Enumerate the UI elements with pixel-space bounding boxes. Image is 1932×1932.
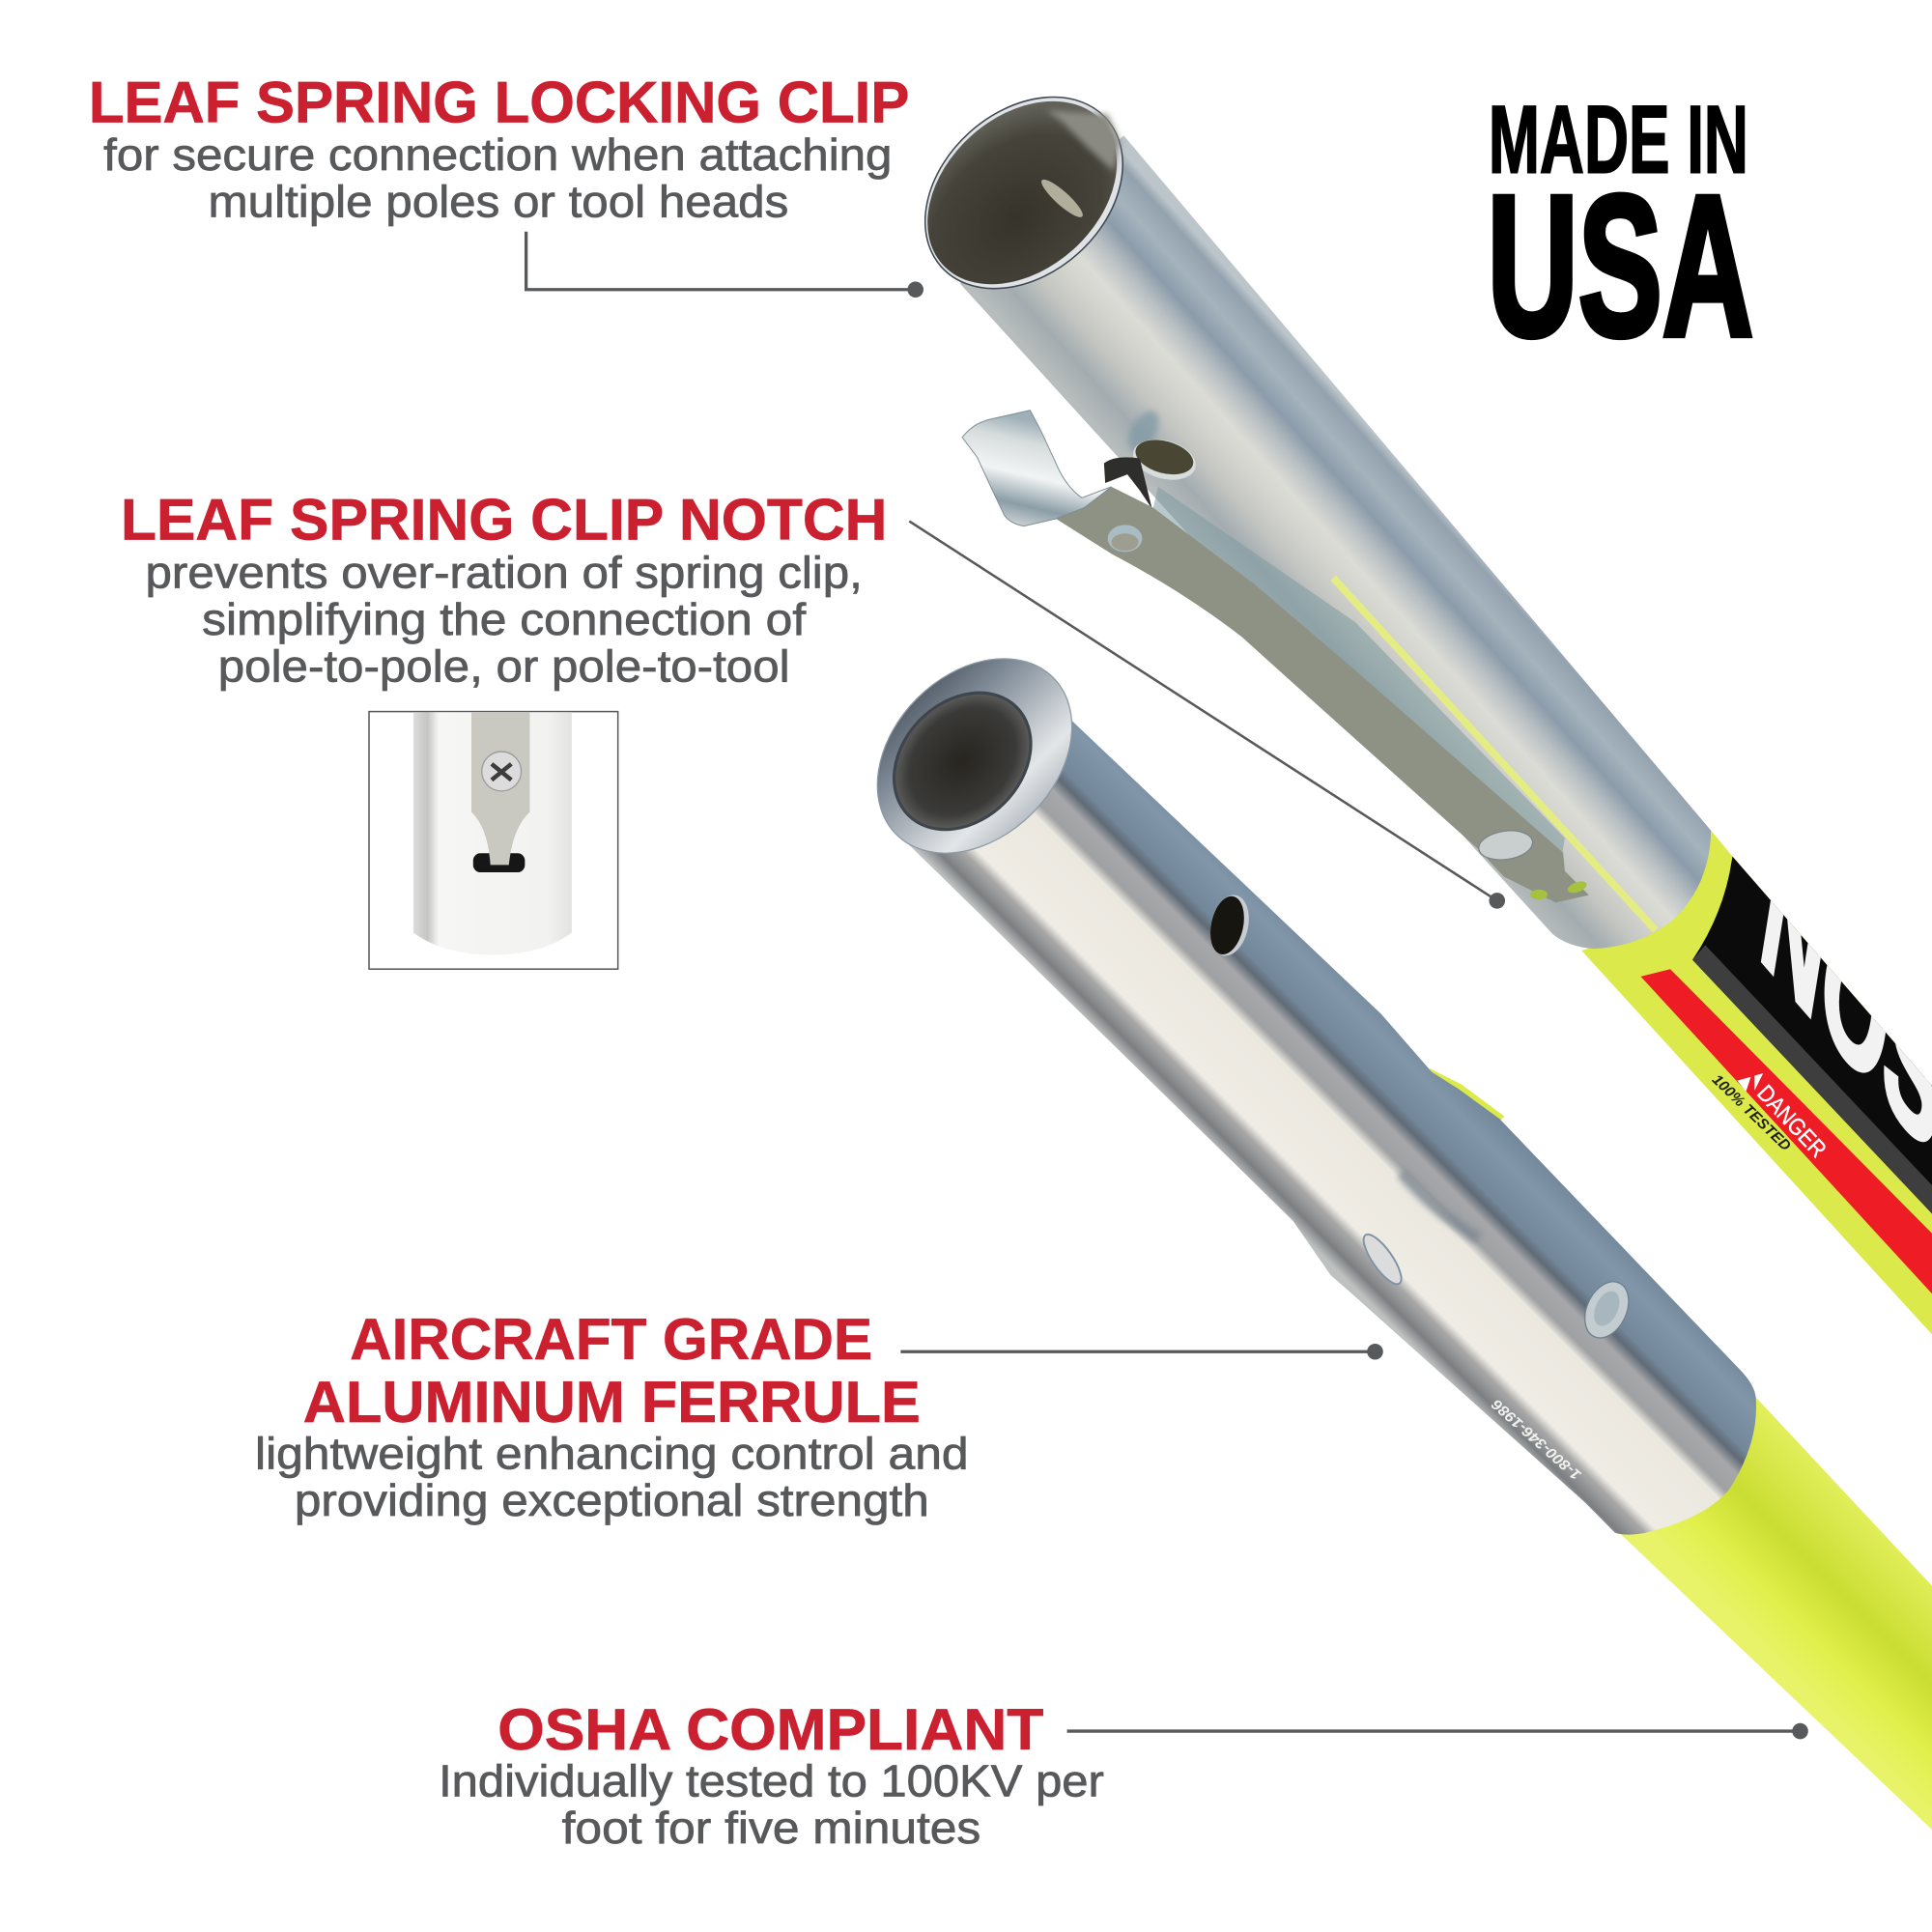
inset frame: [369, 712, 618, 969]
callout: clip notch: [121, 488, 1505, 909]
inset slot: [473, 853, 525, 872]
made in: MADE IN: [1489, 87, 1748, 194]
description line 3: pole-to-pole, or pole-to-tool: [218, 640, 790, 691]
description line 2: foot for five minutes: [562, 1803, 980, 1853]
leader dot: [907, 281, 923, 298]
ferrule rim: [838, 620, 1111, 892]
spring clip hook: [962, 411, 1112, 526]
clip notch openings: [1530, 879, 1588, 899]
clip tail: [1104, 457, 1152, 509]
crimp dent: [1357, 1230, 1407, 1290]
description line 1: lightweight enhancing control and: [255, 1428, 969, 1478]
description line 1: Individually tested to 100KV per: [439, 1756, 1104, 1806]
heading line 2: ALUMINUM FERRULE: [303, 1370, 921, 1435]
description line 1: for secure connection when attaching: [103, 129, 892, 180]
leader dot: [1489, 893, 1505, 909]
shadow beside clip: [1153, 487, 1565, 853]
leader line: [526, 232, 916, 290]
red danger stripe: [1640, 969, 1932, 1293]
upper aluminum tube: [960, 135, 1711, 949]
grey strip on black band: [1692, 945, 1932, 1213]
leader line: [1067, 1730, 1801, 1732]
yellow pole lower: [1614, 1397, 1932, 1830]
inset screw: [482, 752, 522, 791]
leader line: [909, 522, 1497, 900]
ferrule hole: [1206, 892, 1254, 959]
callout: ferrule: [255, 1307, 1383, 1525]
danger label: DANGER: [1751, 1080, 1832, 1163]
tested label: 100% TESTED: [1709, 1071, 1794, 1154]
crimp yellow edge: [1430, 1068, 1504, 1122]
ferrule body: [902, 721, 1756, 1535]
inset tube: [413, 712, 572, 955]
lower aluminum ferrule: [838, 620, 1932, 1830]
clip rivet bottom: [1477, 828, 1535, 863]
description line 2: providing exceptional strength: [295, 1475, 929, 1525]
heading line 1: AIRCRAFT GRADE: [350, 1307, 872, 1372]
heading: OSHA COMPLIANT: [497, 1697, 1043, 1762]
ferrule rivet: [1577, 1274, 1637, 1345]
opening highlight: [1046, 110, 1120, 171]
inset photo of notch: [369, 712, 618, 969]
heading: LEAF SPRING LOCKING CLIP: [89, 70, 909, 134]
leader dot: [1367, 1344, 1383, 1360]
tube opening: [887, 58, 1161, 327]
usa: USA: [1488, 155, 1753, 379]
crimp shading: [1401, 1173, 1479, 1238]
spring clip arm: [1056, 487, 1589, 902]
upper pole with clip: [887, 58, 1932, 1334]
inner slot: [1037, 175, 1087, 221]
danger label: [1737, 1073, 1832, 1163]
yellow reflection on tube: [1333, 578, 1656, 930]
leader dot: [1792, 1723, 1808, 1739]
description line 1: prevents over-ration of spring clip,: [146, 547, 863, 597]
description line 2: multiple poles or tool heads: [209, 176, 788, 226]
callout: locking clip: [89, 70, 923, 298]
made in usa badge: [1488, 87, 1753, 379]
phone imprint: 1-800-346-1986: [1489, 1395, 1584, 1483]
clip rivet top: [1108, 525, 1142, 552]
heading: LEAF SPRING CLIP NOTCH: [121, 488, 887, 553]
description line 2: simplifying the connection of: [202, 594, 806, 644]
inset leaf spring: [471, 712, 529, 865]
blue shadow at clip hole: [1122, 406, 1165, 457]
clip hole: [1128, 433, 1201, 486]
yellow pole collar upper: [1581, 831, 1932, 1334]
leader line: [900, 1350, 1375, 1353]
callout: osha: [439, 1697, 1808, 1853]
black pole band: [1692, 856, 1932, 1213]
